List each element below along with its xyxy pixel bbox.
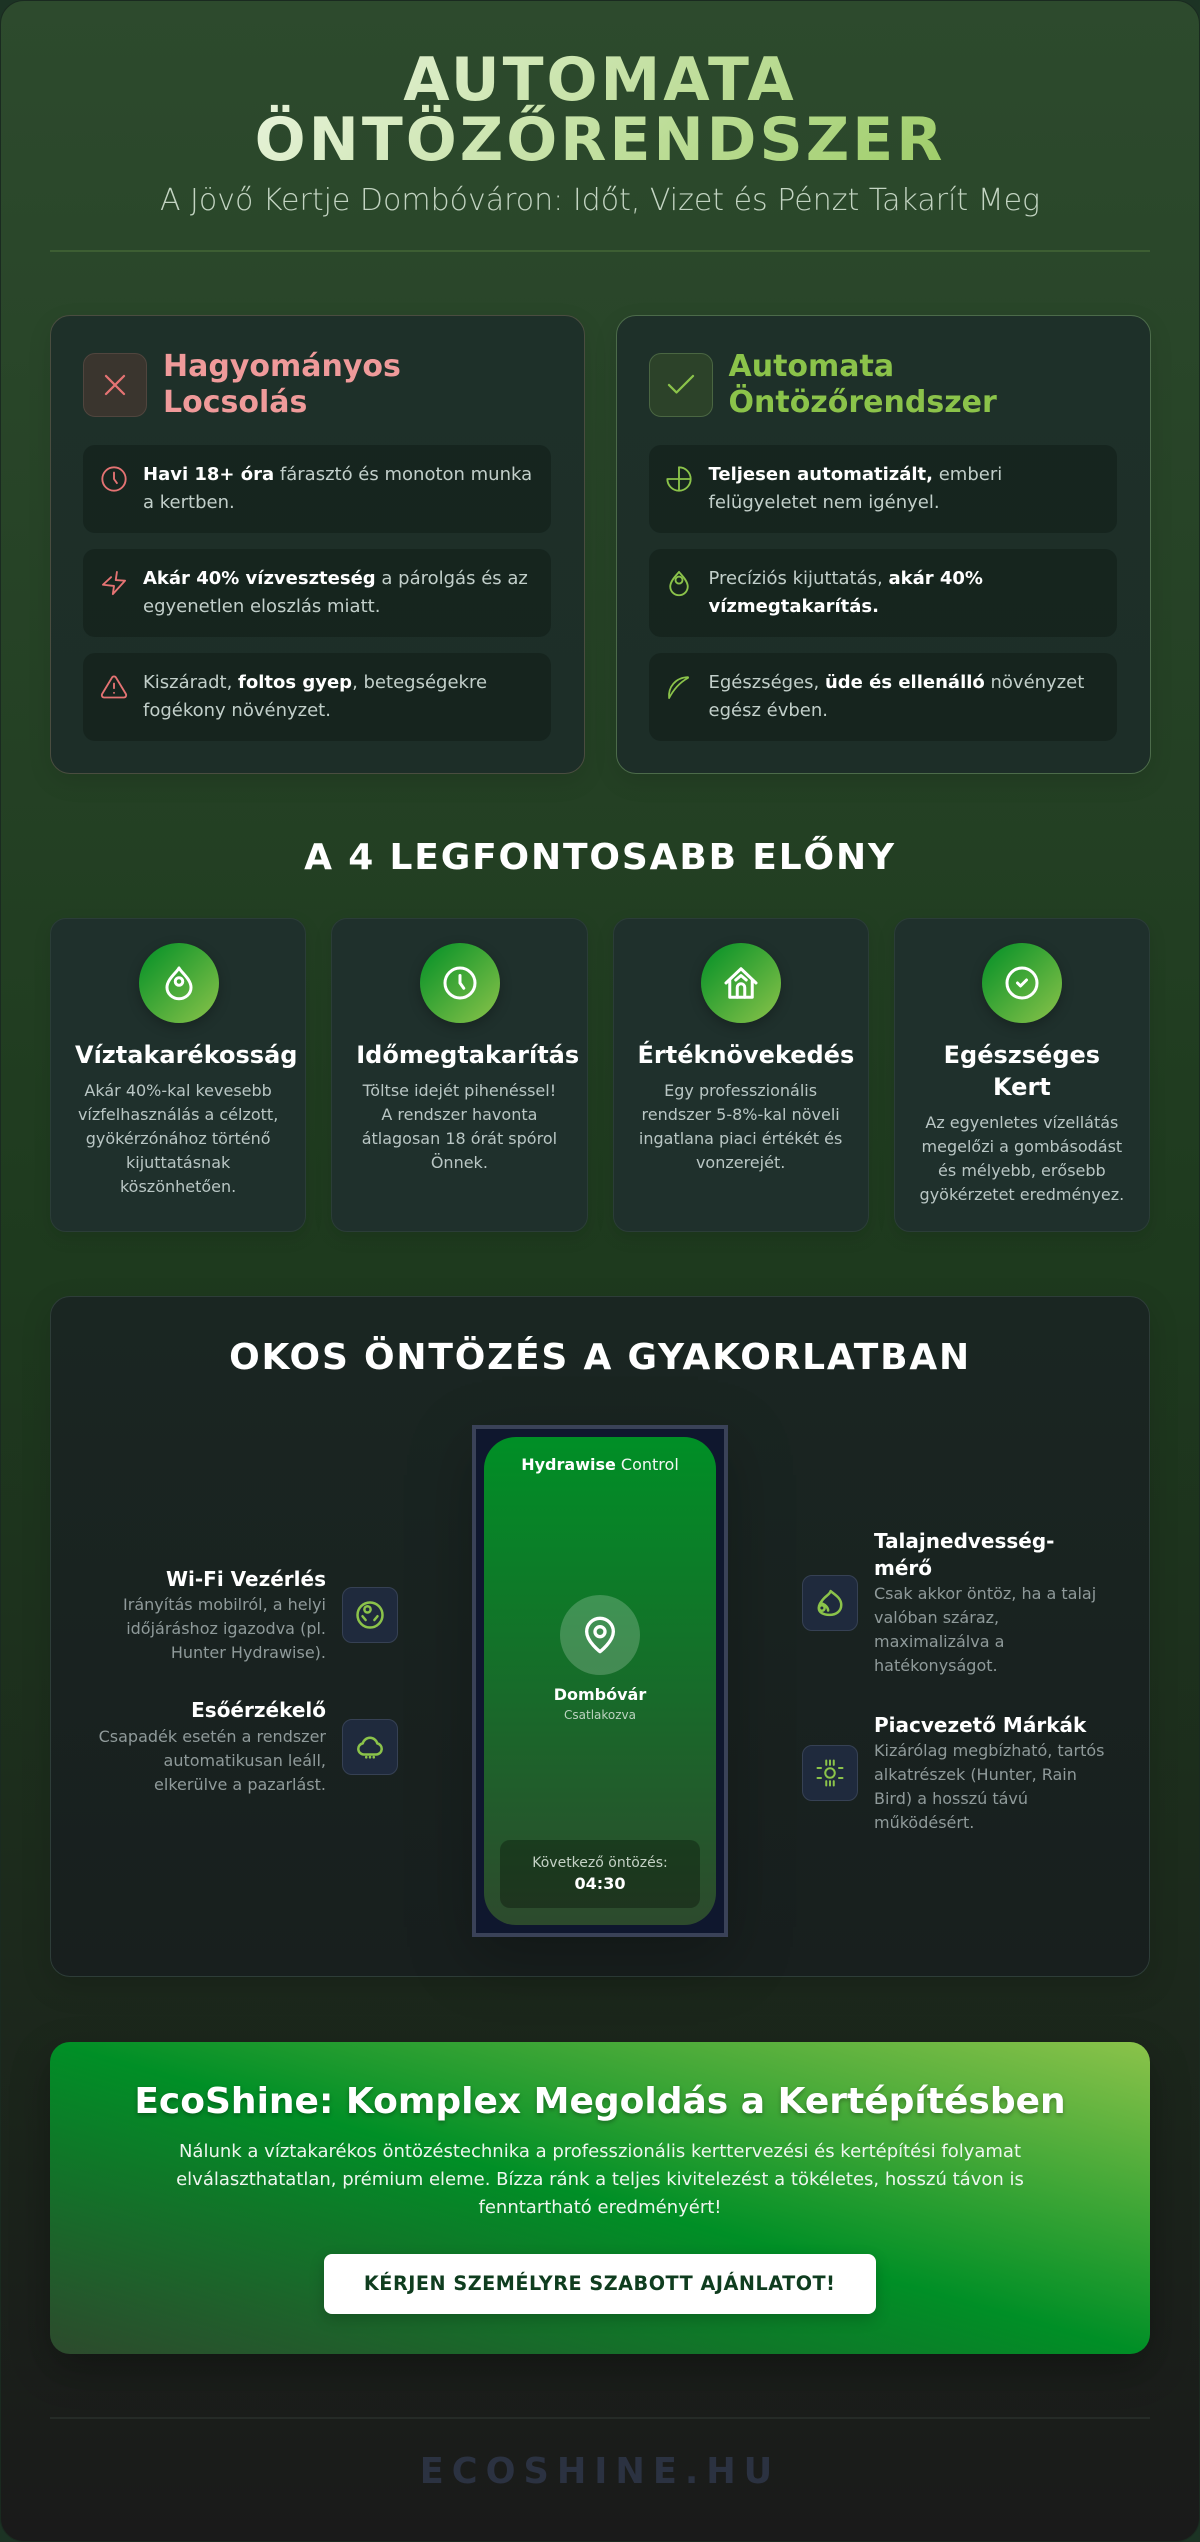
connection status: Csatlakozva — [564, 1708, 636, 1722]
text: Precíziós kijuttatás, akár 40% — [708, 568, 983, 589]
call to action panel — [50, 2042, 1150, 2354]
icon: check circle — [982, 943, 1062, 1023]
feature text: maximalizálva a — [874, 1632, 1004, 1651]
feature: rain sensor — [99, 1698, 398, 1794]
cta text — [176, 2140, 1024, 2218]
card: water saving — [50, 918, 306, 1232]
heading: benefits: A 4 LEGFONTOSABB ELŐNY — [304, 836, 896, 878]
card title: Víztakarékosság — [75, 1041, 297, 1069]
card text: vízfelhasználás a célzott, — [78, 1104, 278, 1124]
icon: check — [648, 353, 712, 417]
feature title: Wi-Fi Vezérlés — [166, 1567, 326, 1591]
cta button: KÉRJEN SZEMÉLYRE SZABOTT AJÁNLATOT! — [364, 2272, 835, 2295]
feature text: Bird) a hosszú távú — [874, 1789, 1028, 1808]
feature text: valóban száraz, — [874, 1608, 999, 1627]
text — [708, 464, 1002, 513]
cta button — [324, 2254, 876, 2314]
feature text: automatikusan leáll, — [164, 1751, 326, 1770]
icon: house — [700, 943, 780, 1023]
row: water loss — [83, 549, 551, 637]
panel: automatic irrigation — [616, 315, 1150, 774]
feature text: Csak akkor öntöz, ha a talaj — [874, 1584, 1096, 1603]
heading: Automata — [728, 349, 894, 384]
row: automated — [648, 445, 1116, 533]
card text — [362, 1080, 557, 1172]
header — [50, 50, 1150, 252]
feature text: elkerülve a pazarlást. — [154, 1775, 326, 1794]
text: felügyeletet nem igényel. — [708, 492, 940, 513]
time: 04:30 — [575, 1874, 625, 1893]
phone screen — [484, 1437, 716, 1925]
heading — [728, 349, 997, 420]
heading: Hagyományos — [163, 349, 401, 384]
card text: kijuttatásnak — [126, 1152, 230, 1172]
text — [708, 672, 1084, 721]
icon: clock — [420, 943, 500, 1023]
cta heading: EcoShine: Komplex Megoldás a Kertépítésben — [134, 2081, 1066, 2122]
feature text: hatékonyságot. — [874, 1656, 998, 1675]
panel: traditional watering — [50, 315, 585, 774]
text — [708, 568, 983, 617]
next watering box — [500, 1840, 700, 1908]
card: value growth — [612, 918, 869, 1232]
title — [50, 50, 1150, 170]
feature text — [99, 1727, 326, 1794]
icon: dial — [666, 466, 692, 492]
cta text: Nálunk a víztakarékos öntözéstechnika a professzionális kerttervezési és kertépítési folyamat — [179, 2140, 1021, 2162]
feature: soil moisture — [802, 1529, 1096, 1675]
card text: Töltse idejét pihenéssel! — [363, 1080, 556, 1100]
card text: ingatlana piaci értékét és — [639, 1128, 842, 1148]
feature text — [874, 1741, 1104, 1832]
card text: és mélyebb, erősebb — [938, 1160, 1106, 1180]
icon: bolt — [102, 571, 126, 596]
feature text: Irányítás mobilról, a helyi — [123, 1595, 326, 1614]
card title: Időmegtakarítás — [356, 1041, 579, 1069]
heading: Locsolás — [163, 385, 307, 420]
card text: Az egyenletes vízellátás — [925, 1112, 1118, 1132]
text: Havi 18+ óra fárasztó és monoton munka — [143, 464, 532, 485]
text: fogékony növényzet. — [143, 700, 331, 721]
feature title: Esőérzékelő — [191, 1698, 326, 1722]
feature text: Hunter Hydrawise). — [171, 1643, 326, 1662]
text: Akár 40% vízveszteség a párolgás és az — [143, 568, 528, 589]
text: egész évben. — [708, 700, 828, 721]
title: AUTOMATA — [403, 45, 797, 115]
text: Teljesen automatizált, emberi — [708, 464, 1002, 485]
icon: location pin — [560, 1595, 640, 1675]
text: vízmegtakarítás. — [708, 596, 879, 617]
feature text: alkatrészek (Hunter, Rain — [874, 1765, 1077, 1784]
heading — [163, 349, 401, 420]
feature text — [123, 1595, 326, 1662]
icon: moisture — [802, 1575, 858, 1631]
app title: Hydrawise Control — [521, 1454, 679, 1474]
icon: wifi dial — [342, 1587, 398, 1643]
feature text: Kizárólag megbízható, tartós — [874, 1741, 1104, 1760]
card text: vonzerejét. — [696, 1152, 785, 1172]
icon: sun — [802, 1745, 858, 1801]
phone mockup — [472, 1425, 728, 1937]
icon: water drop — [139, 943, 219, 1023]
label: Következő öntözés: — [532, 1855, 668, 1871]
row: time — [83, 445, 551, 533]
row: patchy lawn — [83, 653, 551, 741]
card: healthy garden — [894, 918, 1150, 1232]
card text: átlagosan 18 órát spórol — [362, 1128, 557, 1148]
text: Egészséges, üde és ellenálló növényzet — [708, 672, 1084, 693]
feature: wifi control — [123, 1567, 398, 1662]
card text: rendszer 5-8%-kal növeli — [642, 1104, 840, 1124]
text: Kiszáradt, foltos gyep, betegségekre — [143, 672, 487, 693]
subtitle: A Jövő Kertje Dombóváron: Időt, Vizet és Pénzt Takarít Meg — [160, 183, 1040, 218]
row: healthy plants — [648, 653, 1116, 741]
feature title: mérő — [874, 1556, 932, 1580]
icon: drop — [669, 570, 689, 596]
card text — [78, 1080, 278, 1196]
text — [143, 568, 528, 617]
text: a kertben. — [143, 492, 235, 513]
feature text: működésért. — [874, 1813, 974, 1832]
card text: A rendszer havonta — [381, 1104, 537, 1124]
icon: warning — [100, 676, 128, 698]
feature: leading brands — [802, 1713, 1104, 1832]
location name: Dombóvár — [554, 1684, 646, 1704]
feature title: Piacvezető Márkák — [874, 1713, 1086, 1737]
footer brand: ECOSHINE.HU — [420, 2451, 780, 2492]
text — [143, 672, 487, 721]
card text — [639, 1080, 842, 1172]
heading: Öntözőrendszer — [728, 385, 997, 420]
title: ÖNTÖZŐRENDSZER — [255, 105, 945, 175]
card: time saving — [331, 918, 588, 1232]
footer — [50, 2417, 1150, 2508]
panel: smart irrigation — [50, 1296, 1150, 1977]
icon: cross — [83, 353, 147, 417]
feature text: Csapadék esetén a rendszer — [99, 1727, 326, 1746]
card text: Egy professzionális — [664, 1080, 817, 1100]
card text: gyökérzónához történő — [86, 1128, 270, 1148]
card text — [920, 1112, 1124, 1204]
section heading: OKOS ÖNTÖZÉS A GYAKORLATBAN — [229, 1336, 971, 1378]
text: egyenetlen eloszlás miatt. — [143, 596, 380, 617]
card text: Akár 40%-kal kevesebb — [84, 1080, 272, 1100]
row: precision — [648, 549, 1116, 637]
card title: Egészséges Kert — [944, 1041, 1100, 1101]
text — [143, 464, 532, 513]
icon: clock — [101, 466, 127, 492]
card text: megelőzi a gombásodást — [922, 1136, 1122, 1156]
feature title — [874, 1529, 1054, 1580]
icon: cloud — [342, 1719, 398, 1775]
card text: gyökérzetet eredményez. — [920, 1184, 1124, 1204]
card text: Önnek. — [431, 1152, 488, 1172]
feature text: időjáráshoz igazodva (pl. — [126, 1619, 326, 1638]
icon: leaf — [668, 676, 689, 699]
feature text — [874, 1584, 1096, 1675]
cta text: fenntartható eredményért! — [478, 2197, 722, 2218]
card title: Értéknövekedés — [638, 1041, 854, 1069]
cta text: elválaszthatatlan, prémium eleme. Bízza ránk a teljes kivitelezést a tökéletes, hosszú távon is — [176, 2169, 1024, 2190]
feature title: Talajnedvesség- — [874, 1529, 1054, 1553]
card text: köszönhetően. — [120, 1176, 236, 1196]
